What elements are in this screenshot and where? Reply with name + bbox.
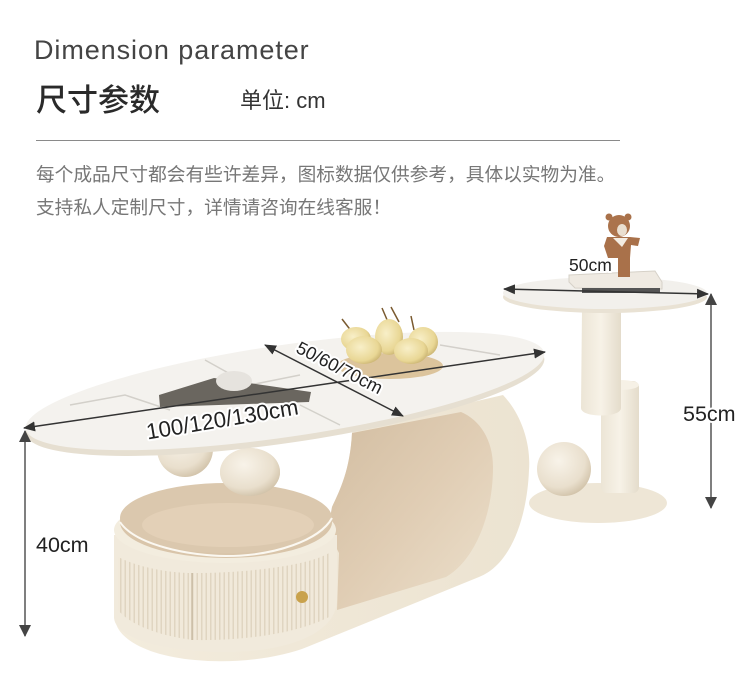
text block: disclaimer: 支持私人定制尺寸，详情请咨询在线客服！ [36, 197, 391, 218]
round tray [120, 483, 332, 558]
front sphere over tray [220, 448, 280, 496]
side table column lower [601, 380, 639, 493]
label: coffee table height: 40cm [36, 533, 89, 557]
side table sphere [537, 442, 591, 496]
label: width: 50/60/70cm [293, 338, 386, 398]
arrow: coffee table width [265, 345, 403, 416]
text block: disclaimer: 每个成品尺寸都会有些许差异，图标数据仅供参考，具体以实物为准。 [36, 164, 615, 185]
label: side table height: 55cm [683, 402, 736, 426]
side table top [503, 277, 707, 313]
bear figurine [604, 214, 640, 277]
label: side table diameter: 50cm [569, 255, 612, 275]
label: length: 100/120/130cm [144, 394, 300, 444]
coffee table top [19, 308, 551, 480]
arrow: side table height [710, 294, 712, 508]
coffee table spheres [157, 421, 280, 496]
arrow: coffee table height [24, 431, 26, 636]
text block: disclaimer [36, 164, 615, 218]
unit label: 单位: cm [240, 88, 326, 113]
books [569, 271, 662, 293]
heading: chinese title: 尺寸参数 [36, 83, 160, 118]
heading: english title: Dimension parameter [34, 35, 310, 65]
drawer knob [296, 591, 308, 603]
arrow: side table diameter [504, 289, 708, 294]
divider rule [36, 140, 620, 141]
side table column upper [581, 310, 621, 416]
arrow: coffee table length [24, 352, 545, 428]
storage drum [114, 497, 337, 652]
coffee table base [115, 395, 529, 661]
side table base [529, 483, 667, 523]
book and bowl on table [159, 371, 311, 407]
fruit bowl with pears [337, 307, 443, 379]
